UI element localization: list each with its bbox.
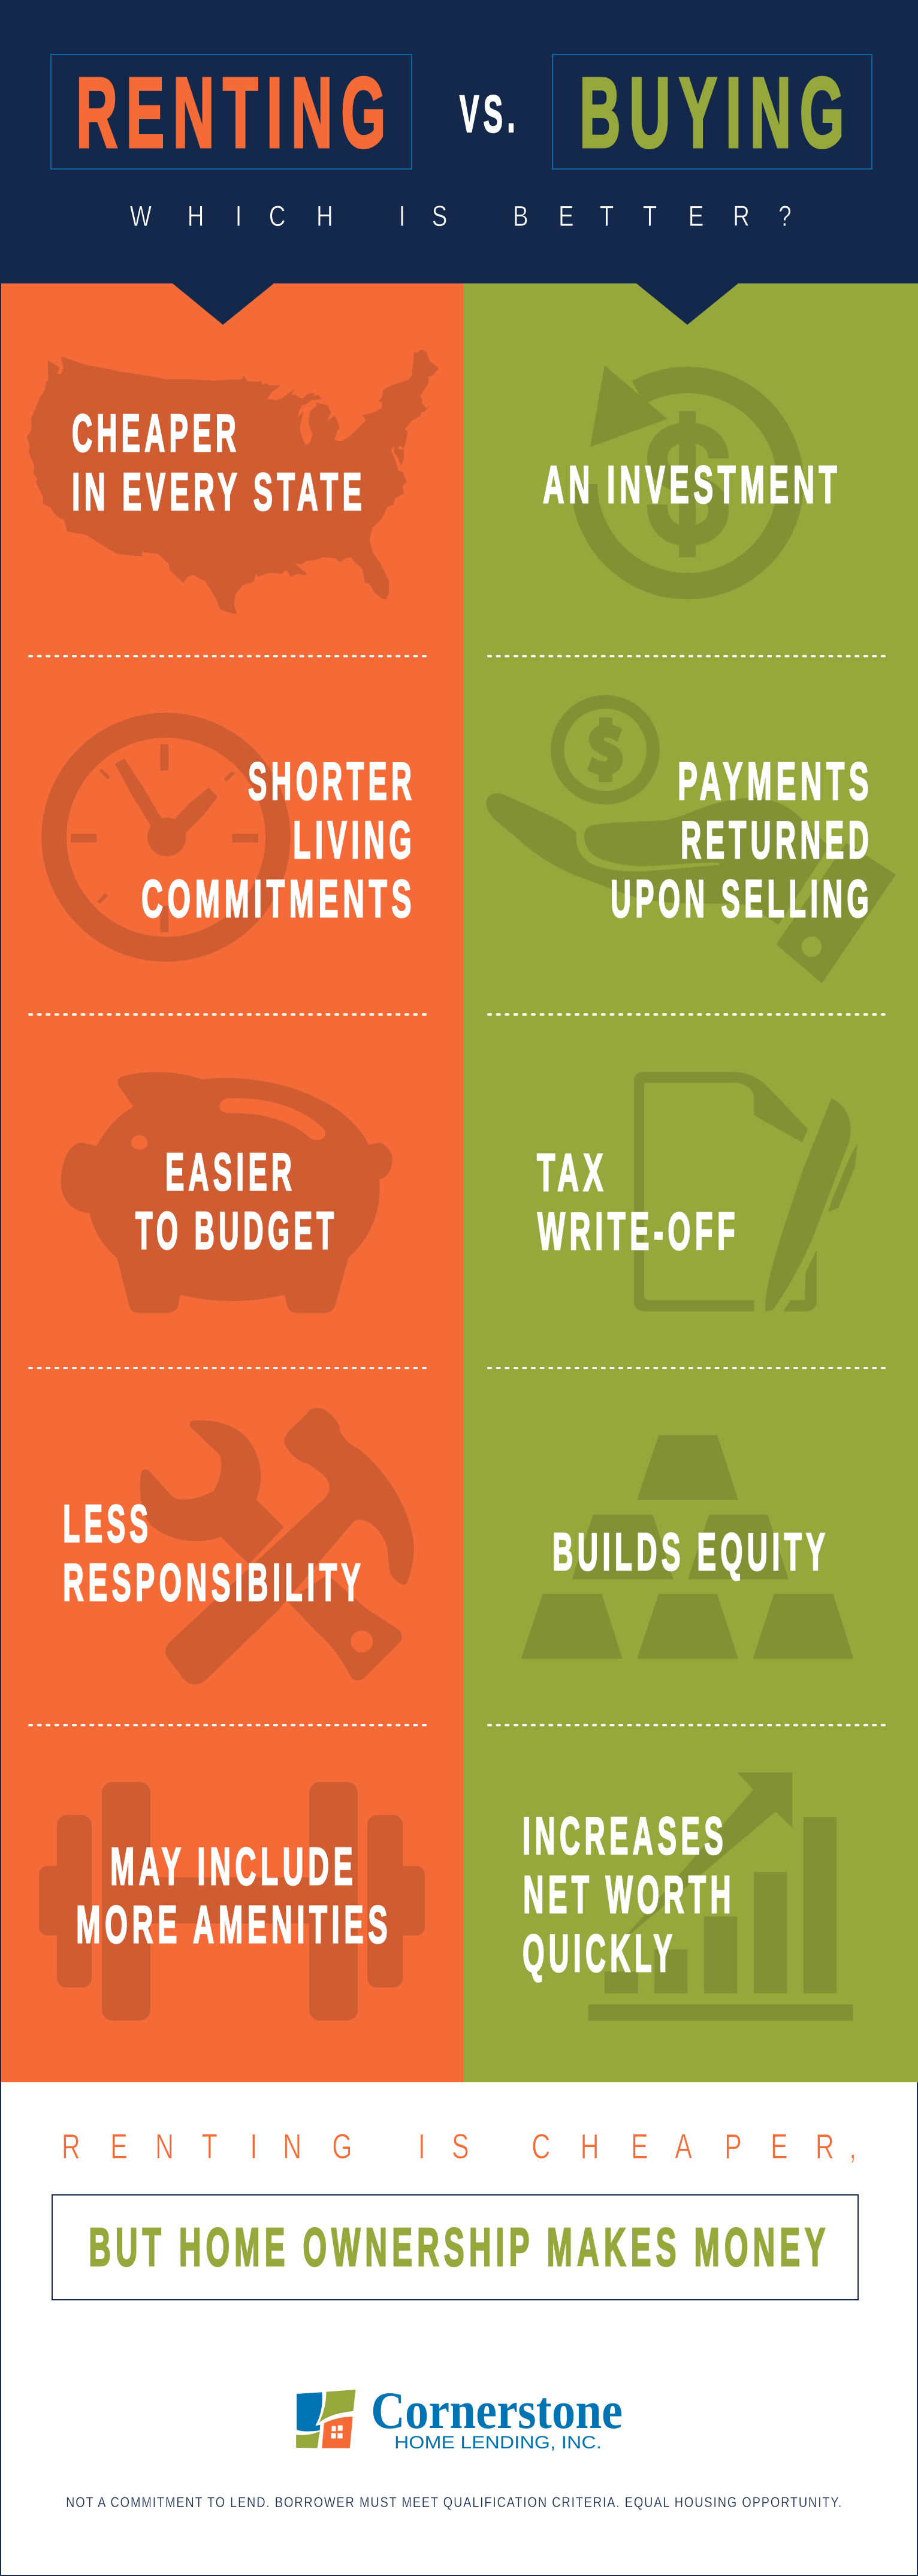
text: shorter living commitments: COMMITMENTS [141,869,416,928]
panel: renting column [1,283,463,2082]
renting title box [51,55,412,169]
text: tax write-off: WRITE-OFF [537,1201,739,1261]
text: easier to budget [135,1142,338,1260]
text: increases net worth quickly: NET WORTH [523,1865,735,1924]
renting title box: RENTING [76,58,394,168]
text: shorter living commitments: LIVING [293,810,416,869]
logo tagline: HOME LENDING, INC. [394,2433,602,2453]
text: increases net worth quickly: INCREASES [523,1806,727,1865]
icon: map of the United States [27,349,439,614]
text: tax write-off: TAX [537,1143,608,1202]
text: easier to budget: EASIER [165,1142,296,1201]
text: less responsibility [63,1494,365,1612]
text: tax write-off [537,1143,739,1261]
icon: dollar with circular arrow [584,366,790,586]
header band [0,0,918,325]
footer: conclusion [52,2127,858,2300]
text: may include more amenities [76,1837,392,1954]
icon: hand receiving coin and banknote [487,695,896,983]
text: shorter living commitments: SHORTER [248,751,416,811]
text: cheaper in every state: CHEAPER [72,403,240,463]
icon: stacked gold bars [521,1435,854,1659]
subtitle: WHICH IS BETTER ? [130,201,792,232]
icon: rising bar chart with arrow [588,1772,853,2021]
icon: wrench and hammer [140,1408,414,1684]
conclusion box [52,2195,858,2300]
renting is cheaper line: RENTING IS CHEAPER, [62,2127,856,2166]
text: may include more amenities: MAY INCLUDE [110,1837,357,1896]
icon: clock [41,713,291,962]
text: easier to budget: TO BUDGET [135,1201,338,1260]
text: cheaper in every state [72,403,366,521]
vs label: VS. [460,85,520,143]
icon: piggy bank [61,1072,392,1313]
icon: document and pen [634,1072,857,1312]
icon: dumbbell [39,1782,425,2021]
text: increases net worth quickly [523,1806,735,1983]
text: less responsibility: RESPONSIBILITY [63,1553,365,1612]
text: shorter living commitments [141,751,416,928]
logo wordmark: Cornerstone [371,2382,623,2440]
text: increases net worth quickly: QUICKLY [523,1923,677,1983]
logo: Cornerstone Home Lending [296,2382,623,2453]
panel: buying column [463,283,918,2082]
text: cheaper in every state: IN EVERY STATE [72,462,366,521]
text: less responsibility: LESS [63,1494,152,1553]
text: payments returned upon selling [611,751,873,928]
text: may include more amenities: MORE AMENITIES [76,1895,392,1954]
logo mark [296,2390,355,2448]
